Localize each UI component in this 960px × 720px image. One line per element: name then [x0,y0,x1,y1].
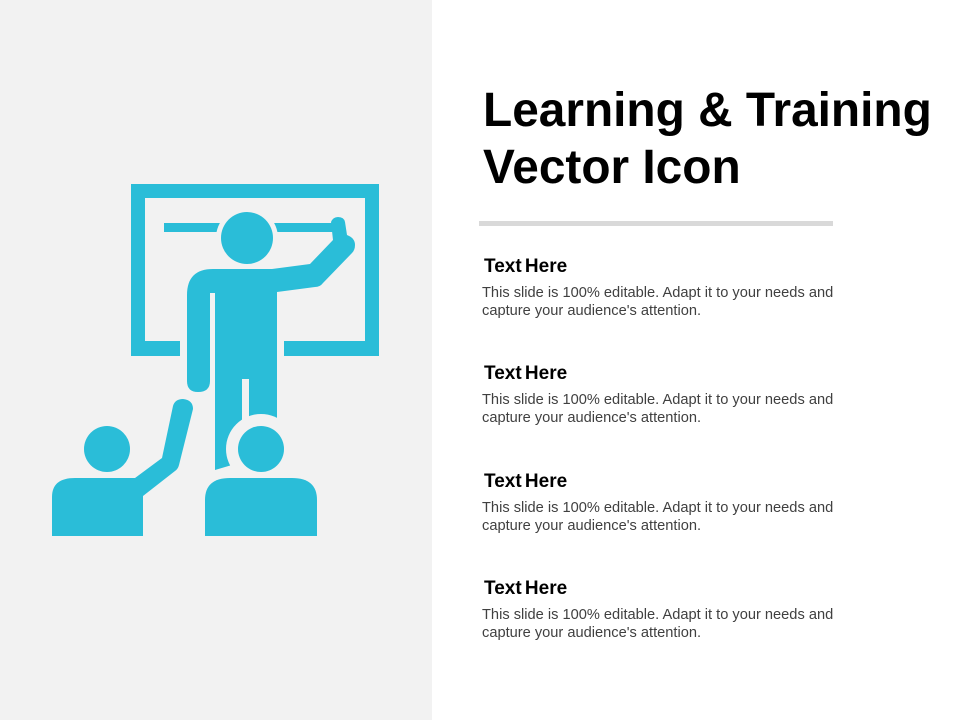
text block 4: capture your audience's attention. [482,625,701,641]
text block 2 [482,363,833,426]
teacher body [187,217,355,470]
title: Vector Icon [483,141,741,194]
text block 3: capture your audience's attention. [482,518,701,534]
left student [52,399,193,536]
icon: teacher at board with two students [52,184,379,536]
text block 1: capture your audience's attention. [482,303,701,319]
text block 1 [482,256,833,319]
text block 4: This slide is 100% editable. Adapt it to your needs and [482,607,833,623]
title [483,84,932,194]
text block 2: capture your audience's attention. [482,410,701,426]
text block 2: Text Here [484,363,567,384]
text block 3: This slide is 100% editable. Adapt it to your needs and [482,500,833,516]
text block 1: Text Here [484,256,567,277]
title: Learning & Training [483,84,932,137]
text block 4: Text Here [484,578,567,599]
text block 1: This slide is 100% editable. Adapt it to your needs and [482,285,833,301]
board frame [131,184,379,356]
text block 2: This slide is 100% editable. Adapt it to your needs and [482,392,833,408]
left panel [0,0,432,720]
right student halo [226,414,296,484]
divider [479,221,833,226]
text block 3 [482,471,833,534]
right student [205,426,317,536]
text block 3: Text Here [484,471,567,492]
text block 4 [482,578,833,641]
teacher head with halo [216,207,278,269]
board writing line [164,223,340,232]
